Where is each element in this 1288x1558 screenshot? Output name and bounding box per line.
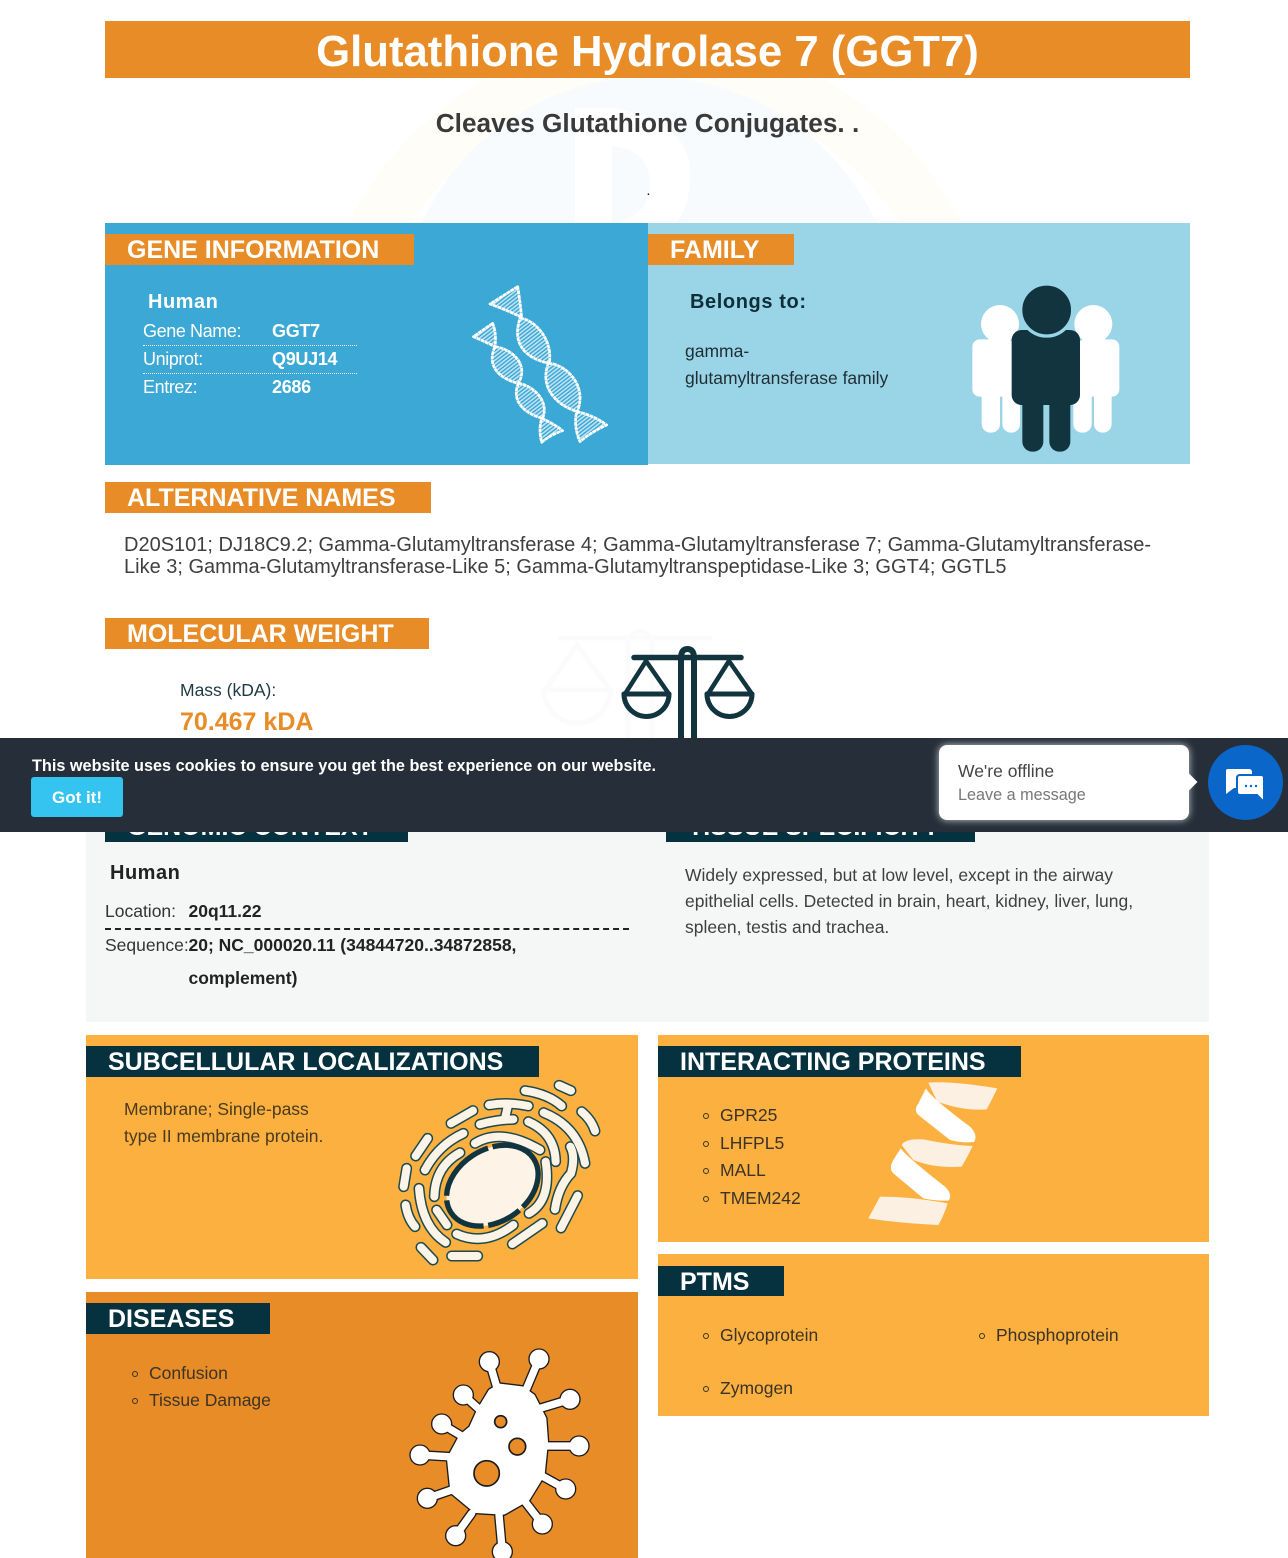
list item: TMEM242 <box>720 1188 801 1208</box>
title banner <box>105 21 1190 78</box>
family description <box>685 341 888 388</box>
gene name row: GGT7 <box>272 321 320 341</box>
icon: balance scales <box>622 646 754 738</box>
location row: Location: <box>105 901 176 921</box>
gene name row <box>143 319 357 346</box>
protein list <box>703 1105 801 1208</box>
entrez row: 2686 <box>272 377 311 397</box>
heading: genomic context: GENOMIC CONTEXT <box>127 813 373 841</box>
list item: LHFPL5 <box>720 1133 784 1153</box>
uniprot row <box>143 347 357 374</box>
alternative names text <box>124 534 1151 578</box>
heading: gene information: GENE INFORMATION <box>127 236 379 264</box>
localization text: type II membrane protein. <box>124 1126 323 1146</box>
cookie message: This website uses cookies to ensure you get the best experience on our website. <box>32 757 656 775</box>
mass label: Mass (kDA): <box>180 680 276 700</box>
card pointer <box>1181 774 1197 790</box>
location row: 20q11.22 <box>188 901 261 921</box>
disease list <box>132 1363 271 1410</box>
entrez row <box>143 377 311 397</box>
watermark: faint scales <box>535 620 725 738</box>
heading: diseases: DISEASES <box>108 1305 234 1333</box>
family description: glutamyltransferase family <box>685 368 888 388</box>
heading: diseases <box>86 1303 270 1334</box>
heading: family <box>648 234 794 265</box>
list item: Confusion <box>149 1363 228 1383</box>
family description: gamma- <box>685 341 749 361</box>
icon: group of people <box>972 286 1120 452</box>
list item: GPR25 <box>720 1105 777 1125</box>
localization text: Membrane; Single-pass <box>124 1099 309 1119</box>
cookie consent bar <box>0 738 1288 832</box>
sequence row: Sequence: <box>105 935 189 955</box>
chat offline card <box>939 745 1189 820</box>
panel: ptms <box>658 1254 1209 1416</box>
list item: glycoprotein: Glycoprotein <box>720 1325 818 1345</box>
panel: genomic context and tissue specificity <box>86 800 1209 1022</box>
centered dot text: . <box>646 182 651 199</box>
list item: phosphoprotein: Phosphoprotein <box>996 1325 1119 1345</box>
icon: dna strands <box>472 285 608 444</box>
got it button <box>31 777 123 817</box>
panel: gene information <box>105 223 648 465</box>
icon: organelle <box>398 1080 600 1266</box>
mass value: 70.467 kDA <box>180 708 313 736</box>
panel: interacting proteins <box>658 1035 1209 1242</box>
sequence row: complement) <box>188 968 297 988</box>
species label: Human <box>148 291 218 313</box>
tissue specificity text: Widely expressed, but at low level, except in the airway epithelial cells. Detected in brain, heart, kidney, liver, lung, spleen, testis and trachea. <box>685 865 1133 937</box>
heading: tissue specificity: TISSUE SPECIFICITY <box>688 813 939 841</box>
list item: MALL <box>720 1160 766 1180</box>
species label: Human <box>110 862 180 884</box>
subtitle: Cleaves Glutathione Conjugates. . <box>436 108 859 138</box>
icon: alpha helix ribbon <box>868 1082 998 1225</box>
uniprot row: Uniprot: <box>143 349 203 369</box>
alternative names text: Like 3; Gamma-Glutamyltransferase-Like 5; Gamma-Glutamyltranspeptidase-Like 3; GGT4; GGTL5 <box>124 556 1007 578</box>
list item: Tissue Damage <box>149 1390 271 1410</box>
panel: diseases <box>86 1292 638 1558</box>
offline heading: We're offline <box>958 761 1054 781</box>
uniprot row: Q9UJ14 <box>272 349 337 369</box>
chat button <box>1208 745 1283 820</box>
gene name row: Gene Name: <box>143 321 241 341</box>
heading: subcellular localizations: SUBCELLULAR LOCALIZATIONS <box>108 1048 503 1076</box>
entrez row: Entrez: <box>143 377 197 397</box>
sequence row: 20; NC_000020.11 (34844720..34872858, <box>188 935 516 955</box>
heading: interacting proteins: INTERACTING PROTEINS <box>680 1048 986 1076</box>
list item: zymogen: Zymogen <box>720 1378 793 1398</box>
sequence row <box>105 935 516 988</box>
heading: ptms <box>658 1266 784 1296</box>
title banner: Glutathione Hydrolase 7 (GGT7) <box>316 27 979 76</box>
panel: subcellular localizations <box>86 1035 638 1279</box>
got it button: Got it! <box>52 788 102 807</box>
heading: molecular weight: MOLECULAR WEIGHT <box>127 620 394 648</box>
alternative names text: D20S101; DJ18C9.2; Gamma-Glutamyltransferase 4; Gamma-Glutamyltransferase 7; Gamma-Glutamyltransferase- <box>124 534 1151 556</box>
icon: virus <box>409 1348 590 1558</box>
belongs to label: Belongs to: <box>690 291 807 313</box>
heading: family: FAMILY <box>670 236 759 264</box>
background watermark logo <box>300 60 1020 230</box>
localization text <box>124 1099 323 1146</box>
heading: alternative names: ALTERNATIVE NAMES <box>127 484 396 512</box>
location row <box>105 899 629 930</box>
heading: ptms: PTMS <box>680 1268 749 1296</box>
panel: family <box>648 223 1190 464</box>
leave a message: Leave a message <box>958 786 1086 804</box>
